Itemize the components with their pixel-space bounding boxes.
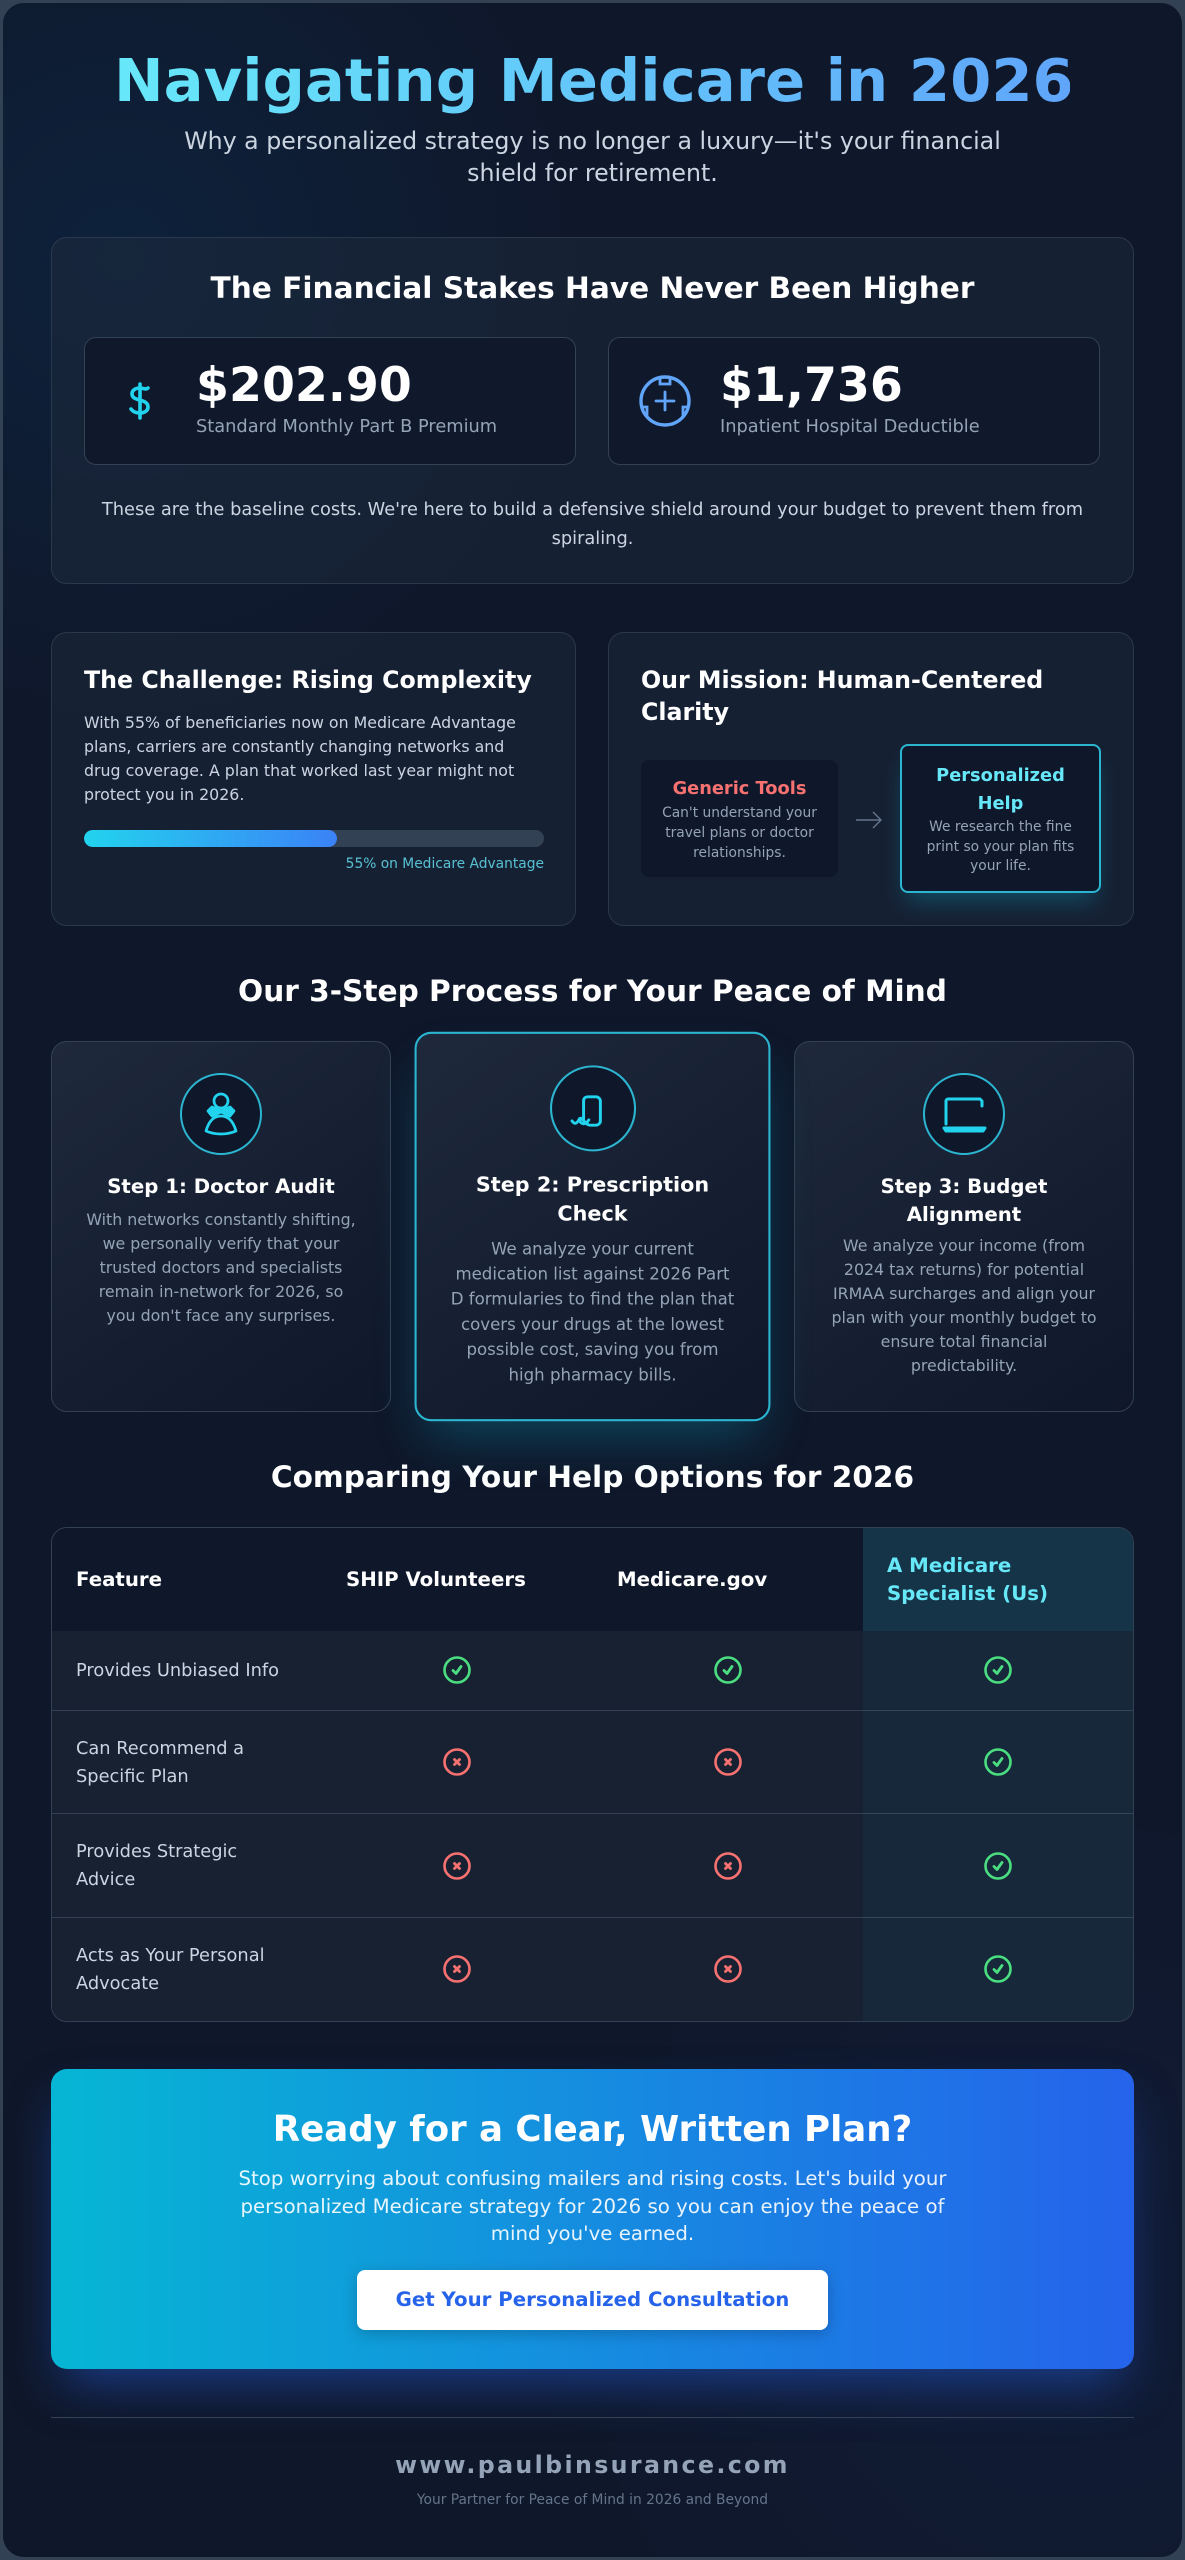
step text: ensure total financial <box>881 1332 1047 1351</box>
stat label: Inpatient Hospital Deductible <box>720 416 980 437</box>
row label: Acts as Your Personal <box>76 1945 265 1966</box>
generic tools text: travel plans or doctor <box>665 825 814 841</box>
row label: Provides Unbiased Info <box>76 1660 279 1681</box>
header: Medicare.gov: Medicare.gov <box>617 1568 767 1591</box>
heading: challenge: The Challenge: Rising Complexity <box>84 666 532 694</box>
CTA heading: Ready for a Clear, Written Plan? <box>273 2109 912 2150</box>
stat value: $1,736 <box>720 358 903 413</box>
website: www.paulbinsurance.com <box>395 2451 790 2479</box>
step text: covers your drugs at the lowest <box>461 1314 724 1334</box>
step text: 2024 tax returns) for potential <box>844 1260 1084 1279</box>
step text: plan with your monthly budget to <box>831 1308 1097 1327</box>
step card 1 <box>51 1041 391 1412</box>
CTA button: Get Your Personalized Consultation <box>396 2288 789 2311</box>
paragraph: challenge: drug coverage. A plan that worked last year might not <box>84 761 514 780</box>
step title: Alignment <box>907 1202 1021 1226</box>
personalized text: print so your plan fits <box>927 839 1074 855</box>
step text <box>86 1210 356 1325</box>
header: SHIP: SHIP Volunteers <box>346 1568 526 1591</box>
title: Navigating Medicare in 2026 <box>114 46 1074 115</box>
personalized heading: Personalized <box>936 765 1065 786</box>
note text: These are the baseline costs. We're here to build a defensive shield around your budget to prevent them from <box>102 499 1083 520</box>
personalized heading <box>936 765 1065 814</box>
personalized text <box>927 819 1074 874</box>
step text <box>451 1239 734 1384</box>
icon: prescription <box>549 1065 636 1151</box>
stat label: Standard Monthly Part B Premium <box>196 416 497 437</box>
panel: mission <box>608 632 1134 926</box>
CTA text <box>238 2167 947 2245</box>
stat value: $202.90 <box>196 358 412 413</box>
step title <box>476 1172 709 1225</box>
step title: Step 1: Doctor Audit <box>107 1175 335 1198</box>
header: specialist: Specialist (Us) <box>887 1582 1048 1605</box>
paragraph: challenge: protect you in 2026. <box>84 785 244 804</box>
step title: Step 3: Budget <box>881 1175 1047 1198</box>
generic tools heading: Generic Tools <box>673 778 806 799</box>
step text: remain in-network for 2026, so <box>99 1282 343 1301</box>
header: specialist: A Medicare <box>887 1554 1011 1577</box>
header: feature: Feature <box>76 1568 162 1591</box>
row 2 <box>52 1710 1133 1813</box>
heading: mission: Clarity <box>641 698 729 726</box>
arrow <box>856 812 882 828</box>
row label <box>76 1841 237 1890</box>
step text: we personally verify that your <box>103 1234 339 1253</box>
heading: mission <box>641 666 1043 726</box>
step card 2 featured <box>415 1032 770 1421</box>
step text: high pharmacy bills. <box>509 1364 676 1384</box>
step text: you don't face any surprises. <box>107 1306 335 1325</box>
step text: predictability. <box>911 1356 1017 1375</box>
step title <box>881 1175 1047 1226</box>
subtitle: Why a personalized strategy is no longer a luxury—it's your financial <box>184 127 1001 155</box>
icon: laptop <box>923 1073 1005 1155</box>
row label: Advice <box>76 1868 135 1890</box>
personalized heading: Help <box>978 793 1023 814</box>
generic tools text <box>662 805 817 861</box>
step card 3 <box>794 1041 1134 1412</box>
step text: medication list against 2026 Part <box>455 1264 730 1284</box>
step title: Step 2: Prescription <box>476 1172 709 1197</box>
step text: trusted doctors and specialists <box>100 1258 342 1277</box>
CTA text: personalized Medicare strategy for 2026 so you can enjoy the peace of <box>240 2195 944 2218</box>
progress caption: 55% on Medicare Advantage <box>346 856 544 872</box>
row label: Specific Plan <box>76 1766 189 1786</box>
heading: process: Our 3-Step Process for Your Peace of Mind <box>238 974 947 1008</box>
CTA button <box>357 2270 828 2330</box>
step text: possible cost, saving you from <box>466 1339 719 1359</box>
generic tools text: Can't understand your <box>662 805 817 821</box>
step text: We analyze your current <box>491 1239 694 1259</box>
icon: medical plus circle <box>639 375 691 427</box>
paragraph: challenge: With 55% of beneficiaries now on Medicare Advantage <box>84 713 516 732</box>
note text <box>102 499 1083 549</box>
panel: financial stakes <box>51 237 1134 584</box>
box: personalized help <box>900 744 1101 893</box>
stat card: part B premium <box>84 337 576 465</box>
comparison table <box>51 1527 1134 2022</box>
heading: comparison: Comparing Your Help Options for 2026 <box>271 1460 914 1494</box>
heading: mission: Our Mission: Human-Centered <box>641 666 1043 694</box>
call to action panel <box>51 2069 1134 2369</box>
subtitle <box>184 127 1001 187</box>
tagline: Your Partner for Peace of Mind in 2026 and Beyond <box>417 2492 768 2508</box>
row label: Advocate <box>76 1972 159 1994</box>
subtitle: shield for retirement. <box>467 159 718 187</box>
row 3 <box>52 1813 1133 1917</box>
progress bar <box>84 830 544 847</box>
icon: doctor <box>180 1073 262 1155</box>
box: generic tools <box>641 760 838 877</box>
stat card: hospital deductible <box>608 337 1100 465</box>
footer <box>51 2417 1134 2527</box>
personalized text: We research the fine <box>929 819 1072 835</box>
highlight column <box>863 1631 1133 2022</box>
step text: With networks constantly shifting, <box>86 1210 356 1229</box>
row label <box>76 1738 244 1786</box>
row 4 <box>52 1917 1133 2022</box>
generic tools text: relationships. <box>693 845 786 861</box>
header: specialist <box>863 1528 1133 1631</box>
status icons <box>443 1656 1012 1983</box>
row label: Can Recommend a <box>76 1738 244 1759</box>
note text: spiraling. <box>552 528 633 549</box>
row 1 <box>52 1631 1133 1710</box>
step title: Check <box>557 1201 628 1225</box>
step text <box>831 1236 1097 1375</box>
panel: challenge <box>51 632 576 926</box>
step text: We analyze your income (from <box>843 1236 1085 1255</box>
row label <box>76 1945 265 1994</box>
step text: D formularies to find the plan that <box>451 1289 734 1309</box>
paragraph: challenge <box>84 713 516 804</box>
icon: dollar <box>129 382 150 420</box>
personalized text: your life. <box>970 858 1031 874</box>
step text: IRMAA surcharges and align your <box>833 1284 1095 1303</box>
heading: financial stakes: The Financial Stakes Have Never Been Higher <box>211 271 974 305</box>
CTA text: mind you've earned. <box>491 2222 694 2245</box>
table header row <box>52 1528 1133 1631</box>
paragraph: challenge: plans, carriers are constantly changing networks and <box>84 737 504 756</box>
CTA text: Stop worrying about confusing mailers and rising costs. Let's build your <box>238 2167 947 2190</box>
row label: Provides Strategic <box>76 1841 237 1862</box>
